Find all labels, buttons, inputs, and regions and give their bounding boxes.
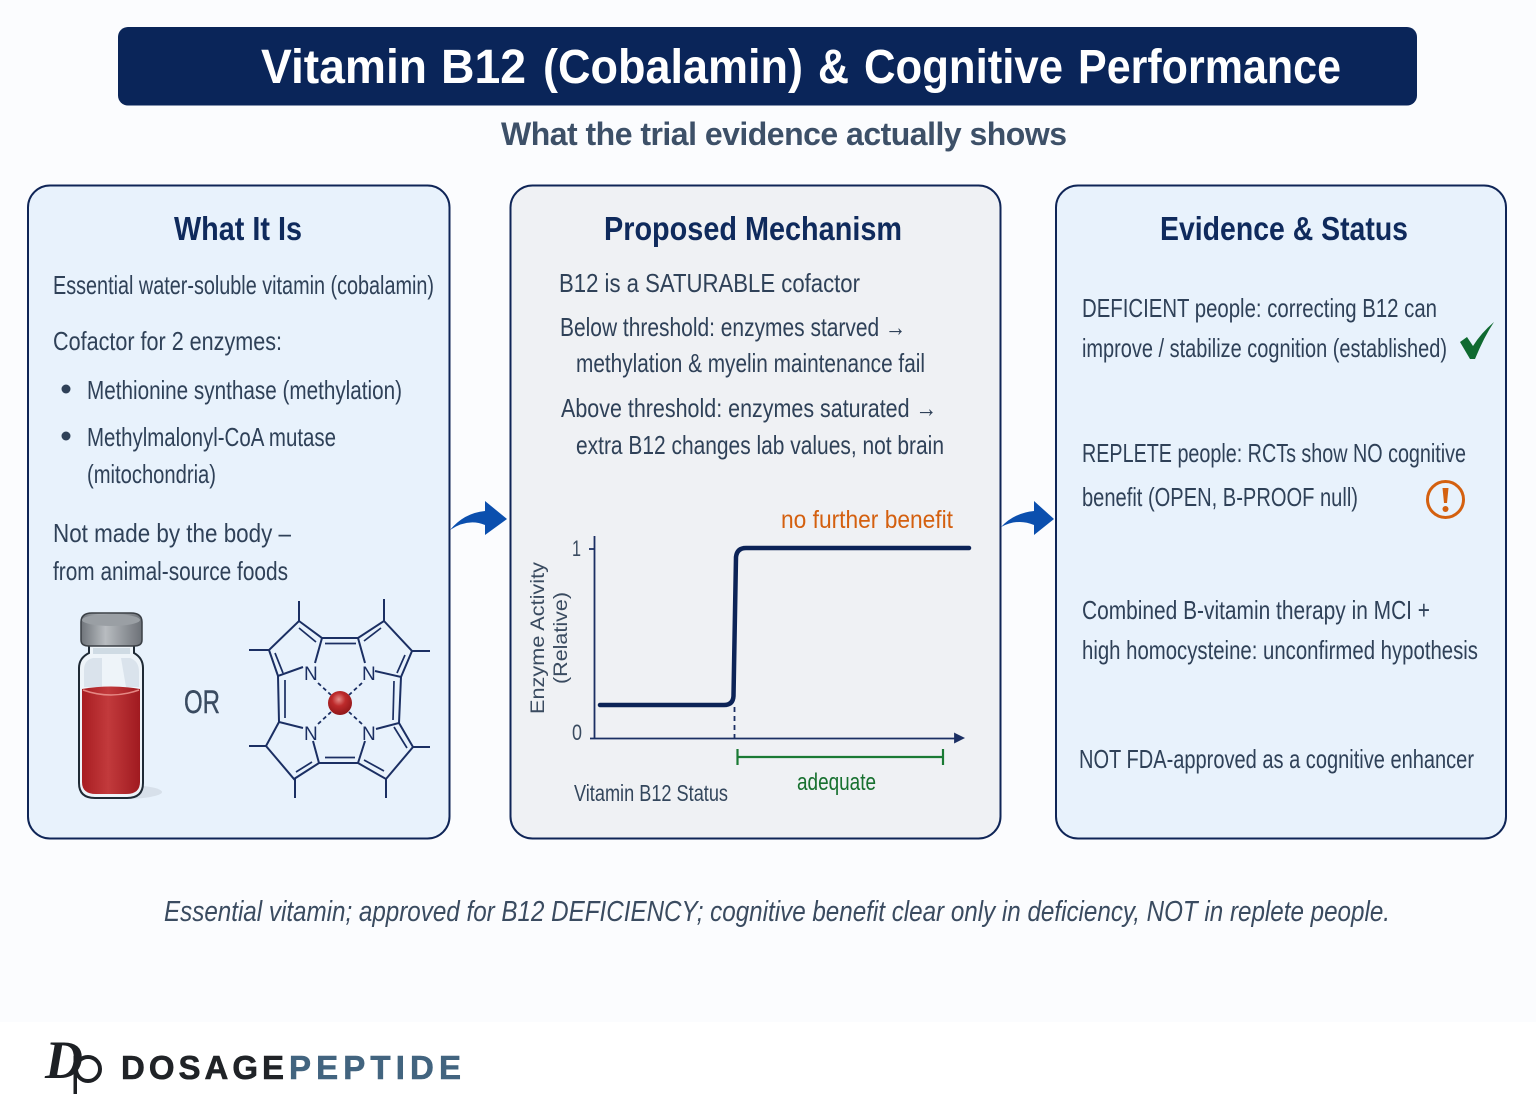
text: deficient people xyxy=(1082,293,1447,363)
icon: corrin ring molecule: N xyxy=(304,664,318,685)
chart: saturation curve: (Relative) xyxy=(551,592,572,684)
text: cofactor list: (mitochondria) xyxy=(87,459,216,489)
chart: saturation curve: 0 xyxy=(572,720,582,745)
text: above threshold: Above threshold: enzymes saturated → xyxy=(561,393,937,423)
logo xyxy=(44,1030,461,1094)
axes xyxy=(589,536,963,742)
text: above threshold xyxy=(561,393,944,460)
text: cofactor list xyxy=(53,326,402,489)
arrow: panel 2 to panel 3 xyxy=(1001,501,1054,535)
text: definition: Essential water-soluble vitamin (cobalamin) xyxy=(53,270,434,300)
text: sources: from animal-source foods xyxy=(53,556,288,586)
text: above threshold: extra B12 changes lab values, not brain xyxy=(576,430,944,460)
axis labels: 1 xyxy=(572,536,581,561)
heading: what it is: What It Is xyxy=(174,210,302,247)
title: & xyxy=(818,41,849,94)
title: Performance xyxy=(1078,41,1341,94)
text: below threshold: Below threshold: enzymes starved → xyxy=(560,312,906,342)
text: deficient people: DEFICIENT people: correcting B12 can xyxy=(1082,293,1437,323)
label: no further benefit: no further benefit xyxy=(781,506,953,534)
icon: warning xyxy=(1428,482,1464,518)
logo mark xyxy=(44,1030,100,1094)
chart: saturation curve: Enzyme Activity xyxy=(528,561,549,714)
bracket: adequate xyxy=(738,749,943,796)
text: replete people: benefit (OPEN, B-PROOF null) xyxy=(1082,482,1358,512)
chart: saturation curve xyxy=(528,506,969,806)
curve xyxy=(600,548,969,705)
bracket: adequate: adequate xyxy=(797,769,876,796)
icon: corrin ring molecule: N xyxy=(304,724,318,745)
icon: check mark xyxy=(1460,322,1494,359)
heading: evidence and status: Evidence & Status xyxy=(1160,210,1408,247)
subtitle: What the trial evidence actually shows xyxy=(501,116,1067,152)
icon: corrin ring molecule: N xyxy=(362,724,376,745)
arrow: panel 1 to panel 2 xyxy=(450,501,507,535)
logo wordmark: DOSAGE xyxy=(121,1049,284,1086)
heading: proposed mechanism: Proposed Mechanism xyxy=(604,210,902,247)
title: Vitamin xyxy=(261,41,427,94)
title: B12 xyxy=(441,41,526,94)
logo wordmark xyxy=(121,1049,461,1086)
panel: what it is xyxy=(28,186,450,838)
text: saturable cofactor: B12 is a SATURABLE cofactor xyxy=(559,268,860,298)
text: or: OR xyxy=(184,684,220,720)
title xyxy=(118,27,1417,106)
logo mark: D xyxy=(44,1030,83,1090)
title: Cognitive xyxy=(864,41,1063,94)
text: replete people xyxy=(1082,438,1466,512)
text: below threshold xyxy=(560,312,925,378)
panel: evidence and status xyxy=(1056,186,1506,838)
text: combined therapy: Combined B-vitamin therapy in MCI + xyxy=(1082,595,1430,625)
text: sources: Not made by the body – xyxy=(53,518,291,548)
icon: corrin ring molecule: N xyxy=(362,664,376,685)
text: cofactor list: Methionine synthase (methylation) xyxy=(87,375,402,405)
text: combined therapy xyxy=(1082,595,1478,665)
chart: saturation curve: Vitamin B12 Status xyxy=(574,780,728,806)
icon: vial xyxy=(79,613,162,799)
icon: corrin ring molecule xyxy=(249,599,430,798)
text: cofactor list: Cofactor for 2 enzymes: xyxy=(53,326,282,356)
text: sources xyxy=(53,518,291,586)
panel: proposed mechanism xyxy=(510,186,1000,838)
text: cofactor list: Methylmalonyl-CoA mutase xyxy=(87,422,336,452)
logo wordmark: PEPTIDE xyxy=(289,1049,461,1086)
text: below threshold: methylation & myelin maintenance fail xyxy=(576,348,925,378)
title: (Cobalamin) xyxy=(543,41,803,94)
